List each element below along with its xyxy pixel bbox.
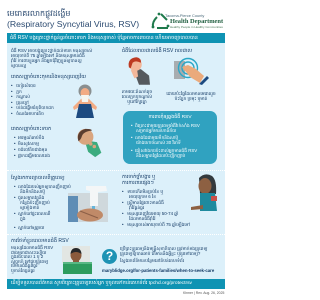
list: adult symptoms: • ក្អក bbox=[11, 89, 22, 94]
text block: intro: រ៉ាំរ៉ៃ ការពារខ្លួនអ្នក និងអ្នកជុំវិញខ្លួនឲ្យបានល្អ bbox=[11, 58, 82, 63]
text block: intro bbox=[11, 48, 92, 68]
text block: when to seek care: គ្រូពេទ្យឱ្យបានឆាប់ តើមាននឹងអ្វីខ្លះ ឬគួរទៅពេទ្យ? bbox=[120, 251, 200, 256]
text block: when to seek care bbox=[120, 246, 208, 264]
list: high risk groups: • មនុស្សពេញវ័យអាយុ 50-74 ឆ្នាំ bbox=[122, 211, 178, 216]
list: infant symptoms: • អារម្មណ៍ឆាប់ខឹង bbox=[14, 135, 44, 140]
list: prevention: • ជូតសម្អាតវត្ថុនិង bbox=[14, 195, 44, 200]
heading: infant symptoms: រោគសញ្ញាចំពោះទារក bbox=[11, 126, 51, 132]
list: adult symptoms: • កណ្តាស់ bbox=[11, 94, 30, 99]
list: infant symptoms bbox=[14, 134, 50, 158]
caption: droplets: ពេលក្អកឬកណ្តាស់ bbox=[122, 94, 152, 99]
list: prevention: • លាងដៃរបស់អ្នកឲ្យបានញឹកញាប់ bbox=[14, 184, 71, 189]
list: high risk groups: ដែលមានជំងឺរ៉ាំរ៉ៃ bbox=[129, 216, 155, 221]
list: high risk groups: • មនុស្សចាស់អាយុចាប់ពី 75 ឆ្នាំឡើងទៅ bbox=[122, 222, 190, 227]
footer bar bbox=[7, 279, 225, 289]
list: adult symptoms: • ចំណង់អាហារតិច bbox=[11, 111, 44, 116]
text block: treatment: ក្នុងរយៈពេល 1 ឬ 2 bbox=[11, 254, 43, 259]
list: adult symptoms bbox=[11, 82, 54, 116]
text block: treatment bbox=[11, 244, 54, 274]
list: high risk groups: អាយុក្រោម 6 ខែ bbox=[129, 194, 156, 199]
panel: main background bbox=[7, 43, 225, 279]
heading: prevention: ស្វែងរកការព្យាបាលពីគ្រូពេទ្យ bbox=[11, 175, 65, 181]
heading: high risk groups: ការការពារផ្សេងៗ bbox=[122, 180, 154, 186]
icon: person in bed bbox=[62, 246, 92, 274]
list: adult symptoms: • ហត់ដង្ហើមធំឬពិបាកដក bbox=[11, 105, 54, 110]
list: prevention bbox=[14, 184, 71, 230]
icon: question mark: ? bbox=[106, 249, 113, 263]
title bbox=[7, 8, 139, 29]
list: prevention: កន្លែងប៉ះញឹកញាប់ bbox=[20, 200, 50, 205]
heading: how RSV spreads: ជំងឺដែលរាលដាលជំងឺ RSV រាលដាល bbox=[122, 48, 192, 54]
list: high risk groups bbox=[122, 188, 190, 228]
title: (Respiratory Syncytial Virus, RSV) bbox=[7, 19, 139, 29]
revision note: Khmer | Rev. Aug. 26, 2025 bbox=[183, 291, 224, 295]
icon: question mark bbox=[102, 249, 117, 264]
text block: treatment: ឬកាន់តែធ្ងន់ធ្ងរ bbox=[11, 268, 35, 273]
icon: hand touching door handle bbox=[174, 58, 209, 85]
logo: Health Department: Health Department bbox=[170, 18, 223, 25]
link: maryblidge.org/for-patients-families/when-to-seek-care bbox=[102, 268, 214, 273]
callout list: • ពិគ្រោះជាមួយគ្រូពេទ្យអំពីវ៉ាក់សាំង RSV bbox=[131, 123, 200, 128]
text block: intro: ជំងឺ RSV អាចបង្កគ្រោះថ្នាក់ដល់ទារក មនុស្សចាស់ bbox=[11, 48, 92, 53]
text block: treatment: បើមានជំងឺធ្ងន់ធ្ងរ bbox=[11, 263, 37, 268]
icon: hand washing bbox=[68, 186, 108, 222]
logo: Health Department bbox=[152, 12, 224, 29]
list: high risk groups: • ស្ត្រីមានផ្ទៃពោះមានជំងឺ bbox=[122, 200, 164, 205]
icon: person coughing bbox=[128, 57, 150, 85]
text block: when to seek care: ស្វែងរកព័ត៌មានបន្ថែមនៅតំបន់គេហទំព័រ bbox=[120, 258, 184, 263]
text block: intro: ឲ្យបានល្អ bbox=[11, 63, 26, 68]
callout list: • ជៀសវាងការប៉ះពាល់អ្នកមានជំងឺ RSV bbox=[131, 148, 197, 153]
callout list bbox=[131, 122, 200, 158]
text block: intro: អាយុចាប់ពី 75 ឆ្នាំឡើងទៅ និងមនុស្សមានជំងឺ bbox=[11, 53, 85, 58]
list: adult symptoms: • ហៀរសំបោរ bbox=[11, 83, 36, 88]
callout list: សម្រាប់អ្នកមានហានិភ័យ bbox=[136, 128, 176, 133]
caption: droplets bbox=[122, 88, 152, 104]
panel: callout prevention bbox=[123, 111, 217, 164]
list: infant symptoms: • មិនសូវសកម្ម bbox=[14, 141, 39, 146]
list: prevention: ឲ្យទៀងទាត់ bbox=[20, 205, 39, 210]
list: prevention: • ស្នាក់នៅផ្ទះពេលឈឺ bbox=[14, 211, 50, 216]
icon: baby bbox=[78, 128, 102, 158]
text block: treatment: មនុស្សដែលមានជំងឺ RSV bbox=[11, 245, 53, 250]
title: មេរោគរលាកផ្លូវដង្ហើម bbox=[7, 9, 70, 18]
logo: Health Department: Tacoma-Pierce County bbox=[165, 12, 204, 18]
heading: high risk groups bbox=[122, 173, 156, 186]
callout list: យ៉ាងហោចណាស់ 30 វិនាទី bbox=[136, 140, 181, 145]
list: prevention: • ស្នាក់នៅឲ្យឆ្ងាយ bbox=[14, 225, 44, 230]
footer bar: ដើម្បីទទួលបានព័ត៌មាន សូមពិគ្រោះគ្រូពេទ្យរបស់អ្នក ឬចូលទៅកាន់គេហទំព័រ tpchd.org/protectrsv bbox=[11, 281, 192, 286]
text block: treatment: សប្តាហ៍ ទៅជួបគ្រូពេទ្យ bbox=[11, 259, 48, 264]
heading: treatment: ការថែទាំខ្លួនពេលមានជំងឺ RSV bbox=[11, 238, 69, 244]
list: high risk groups: រ៉ាំរ៉ៃធ្ងន់ធ្ងរ bbox=[129, 205, 144, 210]
list: infant symptoms: • ផ្អាកដង្ហើមពេលគេង bbox=[14, 153, 50, 158]
text block: when to seek care: ប្រើព្រះគ្រូពេទ្យនិងមន្ត្រីសុខាភិបាល ត្រូវទាក់ទងគ្រូពេទ្យ bbox=[120, 246, 207, 251]
list: prevention: ក្នុង bbox=[20, 216, 26, 221]
heading bar bbox=[7, 33, 225, 43]
callout heading: ការពារកុំឲ្យឆ្លងជំងឺ RSV bbox=[148, 114, 192, 120]
heading: high risk groups: ការចាក់ថ្នាំបង្ការ ឬ bbox=[122, 174, 155, 180]
icon: woman with bandage bbox=[191, 174, 217, 211]
list: adult symptoms: • គ្រុនក្តៅ bbox=[11, 100, 29, 105]
callout list: និងសម្អាតផ្ទៃដែលប៉ះញឹកញាប់ bbox=[136, 153, 185, 158]
caption: contaminated surfaces: ប៉ះភ្នែក ច្រមុះ ឬមាត់ bbox=[175, 96, 207, 100]
heading bar: ជំងឺ RSV បង្កគ្រោះថ្នាក់ធ្ងន់ធ្ងរចំពោះទារក និងមនុស្សចាស់ ប៉ុន្តែអាចការពារបាន ហើយអាចព្យាបាលបាន bbox=[10, 35, 198, 41]
text block: treatment: ជាធម្មតាជាសះស្បើយ bbox=[11, 250, 46, 255]
caption: contaminated surfaces: ដោយប៉ះផ្ទៃដែលមានមេរោគរួច bbox=[166, 90, 216, 96]
icon: person sneezing bbox=[73, 84, 97, 118]
caption: droplets: ឬនៅក្បែរគ្នា bbox=[127, 99, 147, 104]
caption: contaminated surfaces bbox=[166, 90, 216, 102]
callout list: • លាងដៃជាមួយទឹកនិងសាប៊ូ bbox=[131, 135, 178, 140]
list: prevention: នឹងទឹកនិងសាប៊ូ bbox=[20, 189, 45, 194]
list: infant symptoms: • ចង់បៅតិចជាងមុន bbox=[14, 147, 47, 152]
heading: adult symptoms: រោគសញ្ញាចំពោះកុមារនិងមនុស្សពេញវ័យ bbox=[11, 74, 86, 80]
caption: droplets: តាមរយៈតំណក់តូច bbox=[122, 89, 152, 94]
list: high risk groups: • ទារកកើតមិនគ្រប់ខែ ឬ bbox=[122, 189, 163, 194]
logo: Health Department: Healthy People in Healthy Communities bbox=[170, 25, 223, 29]
